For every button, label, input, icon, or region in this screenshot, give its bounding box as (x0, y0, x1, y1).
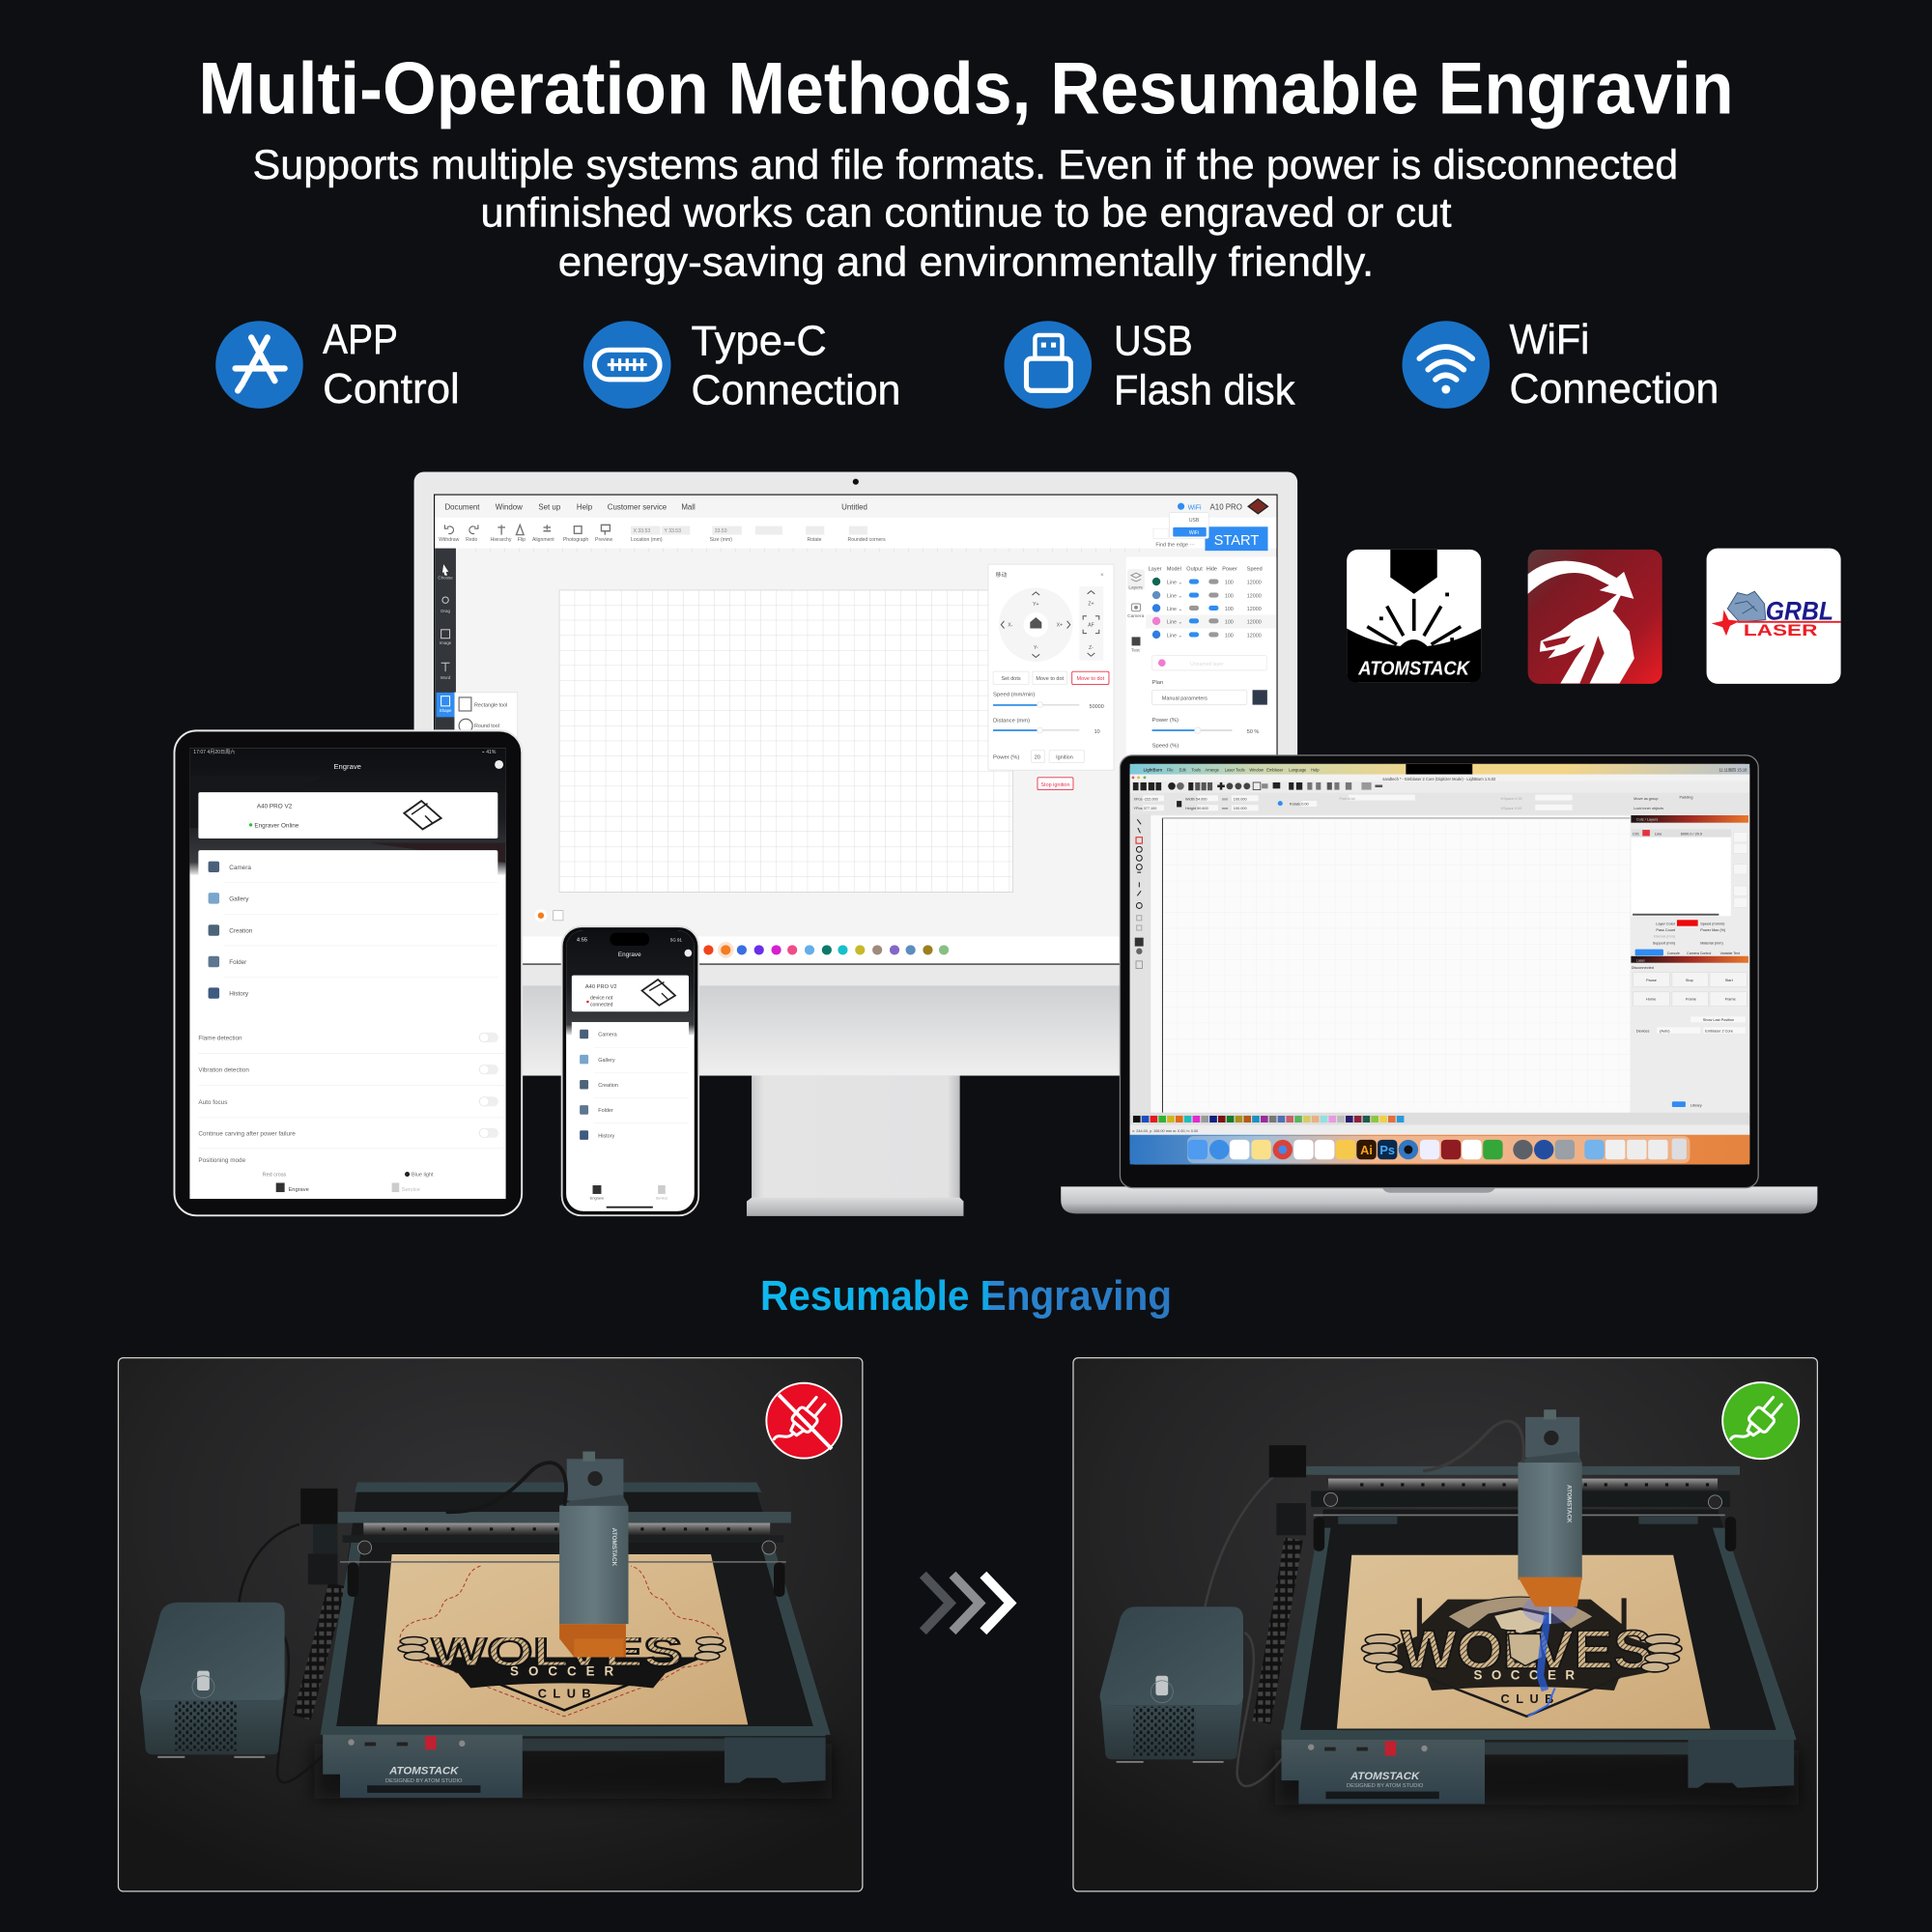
numeric edit bar: VSpace 0.00 (1501, 807, 1521, 810)
partial engraved logo: CLUB (538, 1687, 591, 1701)
move control panel: Move to dot (1077, 676, 1105, 682)
subtitle text block: energy-saving and environmentally friendly. (558, 240, 1374, 286)
numeric edit bar: Padding (1680, 796, 1693, 800)
engraved logo: WOLVES (1401, 1619, 1652, 1680)
menu list: Folder (229, 959, 247, 966)
logo: Atomstack: ATOMSTACK (1357, 658, 1470, 679)
toolbar: 33.53 (715, 528, 727, 534)
cable chain (1262, 1539, 1293, 1722)
menu bar: Language (1289, 767, 1307, 772)
status bar: x: 244.00, y: 106.00 mm w: 0.00, h: 0.00 (1132, 1129, 1198, 1133)
toolbar: X 33.53 (634, 528, 650, 534)
menu bar: Help (577, 502, 593, 511)
label: WiFi Connection: WiFi (1509, 317, 1589, 363)
logo: GRBL Laser: LASER (1744, 621, 1817, 639)
right layer panel: Model (1167, 567, 1181, 573)
feature: APP control (215, 317, 460, 412)
phone device card: device not (590, 995, 613, 1001)
tablet bottom tabs: Service (402, 1187, 420, 1193)
move control panel: X- (1008, 623, 1013, 629)
phone menu list: Gallery (598, 1058, 615, 1064)
machine soft shadow (1275, 1749, 1799, 1805)
menu bar: File (1167, 767, 1174, 772)
menu bar: A10 PRO (1210, 502, 1242, 511)
right layer panel: 12000 (1247, 633, 1262, 639)
right foot (724, 1737, 826, 1783)
monitor (414, 472, 1297, 1216)
move control panel: 20 (1035, 755, 1040, 761)
left tool column (1130, 814, 1151, 1115)
label: WiFi Connection: Connection (1509, 366, 1719, 412)
phone tabs: Engrave (590, 1197, 604, 1201)
frame rails (321, 1482, 831, 1750)
right layer panel: Power (%) (1152, 718, 1179, 724)
laser panel: Start (1725, 979, 1734, 982)
partial engraved logo: SOCCER (510, 1664, 614, 1679)
control box (1282, 1740, 1485, 1804)
laptop lid (1120, 755, 1758, 1188)
status bar (1130, 1125, 1749, 1135)
right layer panel: Line ⌄ (1167, 619, 1182, 625)
left tool sidebar (435, 549, 456, 746)
menu bar: Emblaser (1266, 767, 1284, 772)
tablet bottom tabs (276, 1182, 420, 1193)
frame rails (1282, 1528, 1797, 1754)
menu bar: Arrange (1205, 767, 1220, 772)
phone header: Engrave (618, 952, 641, 958)
logo: GRBL Laser: GRBL (1766, 597, 1833, 626)
phone header: 4:55 (577, 937, 587, 943)
toolbar: Y 33.53 (665, 528, 681, 534)
cuts and layers panel: Support (mm) (1653, 942, 1676, 946)
menu bar: 11:11周四 15:18 (1719, 766, 1747, 772)
START button: Find the edge ··· (1155, 543, 1195, 549)
menu list: History (229, 991, 249, 998)
frame interior floor (1289, 1509, 1792, 1735)
right layer panel: 12000 (1247, 594, 1262, 600)
settings toggles: Auto focus (198, 1099, 227, 1106)
shape tool popup (455, 693, 518, 742)
engraving grid canvas (559, 590, 1012, 892)
move control panel: Power (%) (993, 755, 1019, 761)
toolbar: Withdraw (439, 537, 460, 543)
settings toggles: Continue carving after power failure (198, 1130, 296, 1137)
right layer panel: Speed (%) (1152, 744, 1179, 750)
label: USB Flash disk (1114, 318, 1295, 413)
toolbar: Rotate (807, 537, 822, 543)
left tool sidebar: Word (440, 675, 451, 680)
left tool sidebar: Choose (438, 575, 453, 580)
menu bar: Laser Tools (1225, 767, 1245, 772)
settings toggles (198, 1033, 505, 1178)
icon: usb stick (1005, 321, 1092, 409)
partial engraved logo: WOLVES (431, 1629, 683, 1675)
menu bar: WiFi (1188, 504, 1202, 511)
app header: Engrave (333, 762, 361, 771)
menu bar (1130, 764, 1749, 775)
engraved logo: CLUB (1501, 1691, 1553, 1706)
color swatch bar (1130, 1113, 1749, 1125)
power cable (239, 1524, 323, 1782)
shape tool popup: Rectangle tool (474, 703, 507, 709)
partial engraved logo (398, 1566, 725, 1717)
START button: START (1214, 533, 1259, 549)
move control panel: Move to dot (1036, 676, 1065, 682)
toolbar (435, 518, 1276, 549)
power supply box (140, 1603, 285, 1757)
label: WiFi Connection (1509, 317, 1719, 412)
laser panel (1631, 956, 1748, 1107)
engraved logo: SOCCER (1474, 1668, 1575, 1683)
numeric edit bar: Width 54.000 (1185, 797, 1208, 801)
laptop with LightBurn (1061, 755, 1817, 1213)
right layer panel: Unnamed layer (1190, 662, 1224, 668)
menu bar: Document (444, 502, 480, 511)
menu list: Gallery (229, 895, 249, 902)
software screen (434, 494, 1278, 965)
right layer panel: Line ⌄ (1167, 607, 1182, 612)
subtitle text block: unfinished works can continue to be engraved or cut (480, 190, 1452, 237)
icon: app store (215, 321, 303, 409)
monitor stand (747, 1076, 963, 1216)
cuts and layers panel: Variable Text (1720, 952, 1740, 955)
laser module: ATOMSTACK (1565, 1485, 1572, 1523)
menu list (198, 850, 497, 1008)
subtitle text block: Supports multiple systems and file formats. Even if the power is disconnected (252, 142, 1678, 188)
control box: ATOMSTACK (1350, 1771, 1420, 1782)
phone menu list: Camera (598, 1033, 618, 1038)
right layer panel: Layers (1128, 585, 1143, 591)
phone tabs: Service (656, 1197, 668, 1201)
cuts and layers panel: Line (1655, 833, 1662, 837)
cuts and layers panel: Material (mm) (1700, 942, 1723, 946)
settings toggles: Vibration detection (198, 1067, 249, 1074)
right foot (1688, 1740, 1794, 1788)
numeric edit bar: Move as group (1634, 797, 1659, 801)
right layer panel: Power (1222, 567, 1237, 573)
logo: GRBL Laser (1707, 549, 1841, 684)
toolbar: Size (mm) (710, 537, 732, 543)
laser module: ATOMSTACK (611, 1528, 617, 1567)
laser panel: Home (1646, 998, 1656, 1002)
menu list: Creation (229, 928, 253, 935)
stop ignition button: Stop ignition (1040, 782, 1070, 788)
cuts and layers panel: Console (1667, 952, 1680, 955)
right layer panel: Hide (1207, 567, 1217, 573)
right layer panel: 12000 (1247, 581, 1262, 586)
label: APP Control (323, 317, 460, 412)
right layer panel: 12000 (1247, 619, 1262, 625)
title bar: sandtech * - Emblaser 2 Core (Digitizer Mode) - LightBurn 1.5.02 (1382, 777, 1496, 781)
phone tabs (590, 1185, 668, 1208)
icon: type-c port (583, 321, 671, 409)
feature: USB flash disk (1005, 318, 1295, 413)
right layer panel: 100 (1225, 607, 1234, 612)
phone with app (562, 926, 698, 1215)
right layer panel: Output (1186, 567, 1203, 573)
wood board (377, 1554, 748, 1724)
laser panel: (Auto) (1660, 1029, 1670, 1033)
engraved logo (1361, 1597, 1682, 1717)
toolbar: Photograph (563, 537, 588, 543)
gantry (1269, 1445, 1740, 1551)
right layer panel: Line ⌄ (1167, 594, 1182, 600)
move control panel: Speed (mm/min) (993, 693, 1035, 698)
numeric edit bar: Lock inner objects (1634, 807, 1663, 810)
cuts and layers panel: C01 (1633, 833, 1639, 837)
title: Multi-Operation Methods, Resumable Engravin (198, 47, 1734, 129)
phone menu list (572, 1022, 689, 1149)
icon: wifi (1403, 321, 1490, 409)
control box: ATOMSTACK (388, 1766, 459, 1777)
wallpaper and dock: Ps (1379, 1143, 1395, 1157)
toolbar: Rounded corners (848, 537, 886, 543)
move control panel: 移动 (996, 571, 1007, 579)
phone device card: connected (590, 1002, 613, 1008)
right layer panel: Line ⌄ (1167, 633, 1182, 639)
label: USB Flash disk: Flash disk (1114, 367, 1295, 413)
shape tool popup: Round tool (474, 724, 499, 729)
label: Type-C Connection: Type-C (692, 318, 827, 364)
right layer panel: Plan (1152, 680, 1163, 686)
machine: engraver paused (140, 1452, 832, 1799)
frame interior floor (336, 1492, 808, 1726)
laser panel: Emblaser 2 Core (1705, 1029, 1733, 1033)
right layer panel: Line ⌄ (1167, 581, 1182, 586)
settings toggles: Blue light (412, 1172, 434, 1178)
move control panel: 10 (1094, 729, 1100, 735)
numeric edit bar (1130, 793, 1749, 815)
control box: DESIGNED BY ATOM STUDIO (1347, 1783, 1424, 1789)
feature: Type-C connection (583, 318, 900, 413)
device card: A40 PRO V2 (257, 804, 293, 810)
phone header (566, 930, 695, 1035)
laser panel: Frame (1725, 998, 1736, 1002)
laser cable (446, 1463, 566, 1512)
toolbar: Redo (466, 537, 477, 543)
wood board (1337, 1555, 1710, 1729)
right layer panel: 100 (1225, 594, 1234, 600)
tablet with app (174, 730, 522, 1215)
cuts and layers panel: Layer Color (1656, 922, 1676, 925)
cuts and layers panel: Pass Count (1656, 928, 1676, 932)
badge: unplugged (766, 1383, 841, 1459)
move control panel: Distance (mm) (993, 718, 1030, 724)
toolbar: Alignment (532, 537, 554, 543)
work canvas (1151, 815, 1631, 1113)
numeric edit bar: 100.000 (1234, 797, 1247, 801)
right layer panel: 12000 (1247, 607, 1262, 612)
toolbar: Preview (595, 537, 613, 543)
numeric edit bar: YPos 377.100 (1133, 807, 1156, 810)
menu bar: Window (1249, 767, 1264, 772)
arrow (923, 1575, 1010, 1632)
menu bar: Customer service (608, 502, 668, 511)
menu bar: LightBurn (1144, 767, 1163, 772)
phone menu list: History (598, 1133, 615, 1139)
move control panel (988, 564, 1114, 770)
laptop base (1061, 1186, 1817, 1213)
left tool sidebar: Image (440, 640, 452, 645)
left tool sidebar: Drag (440, 609, 450, 613)
move control panel: Ignition (1056, 755, 1073, 761)
numeric edit bar: mm (1222, 807, 1228, 810)
right layer panel: 100 (1225, 581, 1234, 586)
right layer panel: 100 (1225, 633, 1234, 639)
move control panel: × (1100, 572, 1104, 579)
move control panel: Z- (1089, 645, 1094, 651)
badge: plugged in (1722, 1382, 1799, 1459)
menu bar: Set up (538, 502, 561, 511)
menu bar: Tools (1191, 767, 1201, 772)
title bar (1130, 775, 1749, 781)
numeric edit bar: 100.000 (1234, 807, 1247, 810)
control box: DESIGNED BY ATOM STUDIO (385, 1778, 463, 1784)
right layer panel: Camera (1127, 613, 1145, 619)
settings toggles: Red cross (263, 1172, 287, 1178)
menu bar (435, 496, 1276, 518)
connection dropdown (1169, 513, 1208, 538)
move control panel: Set dots (1002, 676, 1021, 682)
feature: WiFi connection (1403, 317, 1719, 412)
right layer panel: Test (1131, 648, 1140, 654)
cuts and layers panel: Interval (mm) (1654, 935, 1676, 939)
cuts and layers panel (1631, 815, 1749, 1115)
phone device card: A40 PRO V2 (585, 984, 617, 990)
right layer panel: 50 % (1247, 729, 1259, 735)
right layer panel: Manual parameters (1162, 696, 1208, 701)
laptop screen (1130, 764, 1749, 1164)
app header: ⌁ 41% (482, 750, 497, 755)
laser module (559, 1452, 629, 1658)
cuts and layers panel: Speed (mm/m) (1700, 922, 1725, 925)
panel: power cut, engraving interrupted (118, 1358, 863, 1891)
laser panel: Library (1690, 1103, 1702, 1107)
connection dropdown: WiFi (1189, 530, 1199, 536)
left tool sidebar: Shape (440, 708, 452, 713)
gantry (300, 1489, 791, 1597)
menu bar: Mall (681, 502, 696, 511)
toolbar: Location (mm) (631, 537, 663, 543)
toolbar icons (1130, 781, 1749, 793)
START button (1153, 526, 1267, 551)
numeric edit bar: HSpace 0.00 (1501, 797, 1522, 801)
menu list: Camera (229, 865, 251, 871)
cable chain (301, 1584, 337, 1718)
power supply box (1100, 1606, 1243, 1762)
laser panel: Laser (1636, 959, 1646, 963)
menu bar: Edit (1179, 767, 1187, 772)
move control panel: AF (1088, 623, 1094, 629)
laser panel: Devices (1636, 1029, 1650, 1033)
laser panel: Stop (1686, 979, 1693, 982)
laser cable (1423, 1421, 1523, 1471)
device card (198, 792, 497, 838)
move control panel: X+ (1057, 623, 1063, 629)
stop ignition button (1037, 778, 1073, 790)
wallpaper and dock (1130, 1135, 1749, 1164)
laser panel: Frame (1686, 998, 1696, 1002)
app header: 17:07 4月20日周六 (193, 749, 235, 755)
laser panel: Pause (1646, 979, 1657, 982)
right layer panel: Speed (1247, 567, 1263, 573)
color palette strip (523, 937, 1120, 964)
section heading: Resumable Engraving (760, 1273, 1172, 1320)
settings toggles: Flame detection (198, 1036, 242, 1042)
device card: Engraver Online (254, 823, 299, 830)
panel: power restored, engraving resumed (1073, 1358, 1817, 1891)
label: USB Flash disk: USB (1114, 318, 1193, 364)
phone header: 5G 91 (670, 937, 683, 942)
machine: engraver running (1100, 1409, 1799, 1805)
laser beam (1523, 1595, 1577, 1717)
right layer panel: 100 (1225, 619, 1234, 625)
label: APP Control: APP (323, 317, 398, 363)
phone device card (572, 976, 689, 1011)
logo: LightBurn dragon (1528, 550, 1662, 684)
numeric edit bar: XPos -222.000 (1133, 797, 1158, 801)
numeric edit bar: Height 50.600 (1185, 807, 1208, 810)
menu bar: Help (1311, 767, 1320, 772)
monitor body (414, 472, 1297, 1076)
cuts and layers panel: Camera Control (1687, 952, 1712, 955)
numeric edit bar: Rotate 0.00 (1290, 803, 1309, 807)
numeric edit bar: mm (1222, 797, 1228, 801)
connection dropdown: USB (1189, 518, 1200, 524)
label: Type-C Connection (692, 318, 900, 413)
phone menu list: Folder (598, 1108, 613, 1114)
move control panel: Z+ (1088, 601, 1094, 607)
wallpaper and dock: Ai (1360, 1143, 1373, 1157)
menu bar: Untitled (841, 502, 867, 511)
label: Type-C Connection: Connection (692, 367, 900, 413)
cuts and layers panel: 6000.0 / 20.0 (1681, 833, 1702, 837)
numeric edit bar: Font Arial (1339, 797, 1355, 801)
tablet bottom tabs: Engrave (288, 1187, 309, 1193)
laser panel: Disconnected (1632, 966, 1654, 970)
cuts and layers panel: Cuts / Layers (1636, 817, 1658, 821)
right layer panel: Layer (1149, 567, 1162, 573)
mini zoom controls (535, 909, 563, 922)
app header (189, 748, 506, 875)
label: APP Control: Control (323, 366, 460, 412)
phone menu list: Creation (598, 1083, 618, 1089)
toolbar: Hierarchy (491, 537, 512, 543)
ruler (475, 549, 1140, 553)
laser panel: Show Last Position (1703, 1018, 1734, 1022)
menu bar: Window (496, 502, 523, 511)
move control panel: Y- (1034, 645, 1038, 651)
machine soft shadow (314, 1744, 832, 1799)
subtitle text block (252, 142, 1678, 286)
right layer panel (1126, 557, 1276, 766)
move control panel: Y+ (1033, 602, 1039, 608)
settings toggles: Positioning mode (198, 1157, 246, 1164)
power cable (1205, 1476, 1301, 1786)
cuts and layers panel: Power Max (%) (1700, 928, 1726, 932)
logo: Atomstack (1347, 550, 1481, 683)
laser module (1518, 1409, 1582, 1606)
move control panel: 50000 (1090, 704, 1104, 710)
toolbar: Flip (518, 537, 526, 543)
control box (323, 1735, 523, 1798)
